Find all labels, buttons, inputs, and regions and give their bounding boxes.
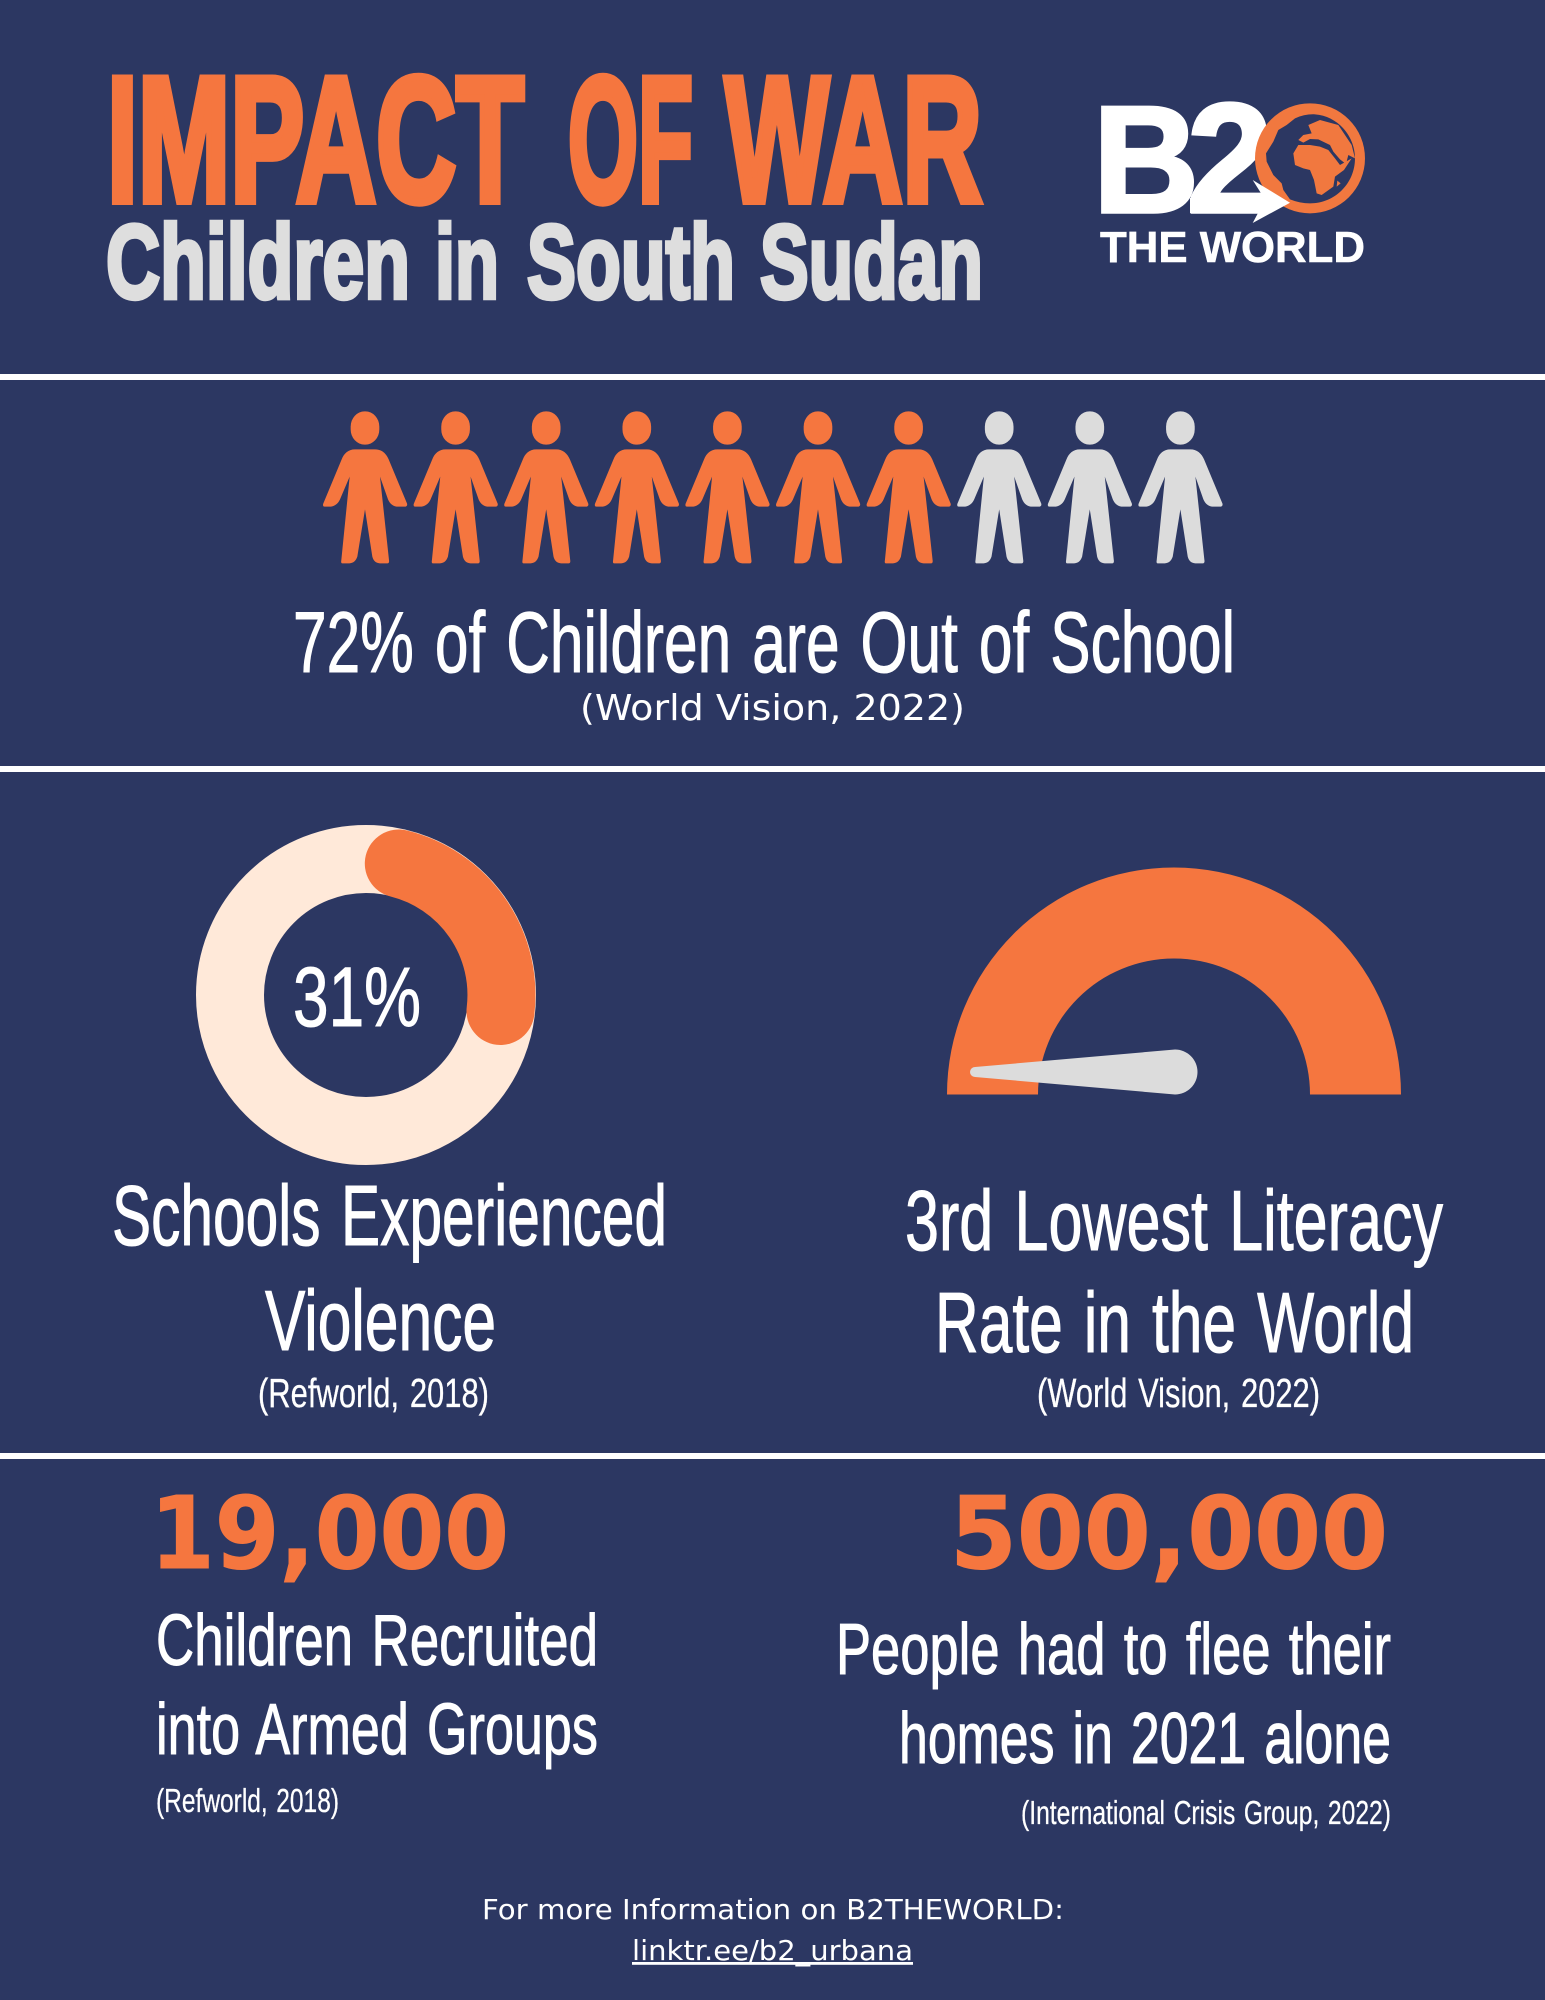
source: world vision: (World Vision, 2022) (580, 688, 965, 729)
footer (482, 1893, 1064, 1967)
icon: logo arrow (1190, 180, 1290, 223)
gauge needle (970, 1050, 1198, 1094)
label: children recruited: Children Recruited (156, 1601, 598, 1681)
title: WAR (725, 40, 982, 239)
label: children recruited: into Armed Groups (156, 1690, 598, 1770)
footer: linktr.ee/b2_urbana (632, 1934, 913, 1967)
logo wordmark B2 (1093, 72, 1273, 246)
donut chart: 31% (230, 859, 502, 1131)
pictogram: 7 of 10 children (323, 411, 1223, 563)
label: schools experienced violence: Schools Experienced (112, 1169, 667, 1264)
donut value: 31% (293, 950, 421, 1044)
subtitle: in (435, 204, 499, 321)
source: world vision: (World Vision, 2022) (1037, 1370, 1320, 1416)
footer: For more Information on B2THEWORLD: (482, 1893, 1064, 1926)
logo text: the world: THE WORLD (1100, 223, 1365, 272)
gauge chart: literacy (947, 867, 1401, 1094)
label: people fled (836, 1610, 1391, 1779)
subtitle: South (527, 204, 735, 321)
source: refworld: (Refworld, 2018) (258, 1370, 489, 1416)
subtitle: Children (106, 204, 410, 321)
title: OF (568, 40, 693, 239)
stat: 500,000: 500,000 (950, 1475, 1388, 1592)
title: IMPACT (107, 40, 524, 239)
source: international crisis group: (International Crisis Group, 2022) (1021, 1794, 1391, 1831)
icon: globe (1255, 103, 1365, 213)
subtitle (106, 204, 983, 321)
logo: B2 the world (1093, 72, 1365, 272)
subtitle: Sudan (760, 204, 983, 321)
label: 3rd lowest literacy (905, 1174, 1443, 1371)
label: schools experienced violence: Violence (265, 1274, 496, 1369)
logo wordmark B2: B (1093, 75, 1199, 245)
logo wordmark B2: 2 (1187, 72, 1273, 246)
label: children recruited (156, 1601, 598, 1770)
source: refworld: (Refworld, 2018) (156, 1782, 339, 1819)
stat: 19,000: 19,000 (150, 1475, 509, 1592)
label: schools experienced violence (112, 1169, 667, 1369)
